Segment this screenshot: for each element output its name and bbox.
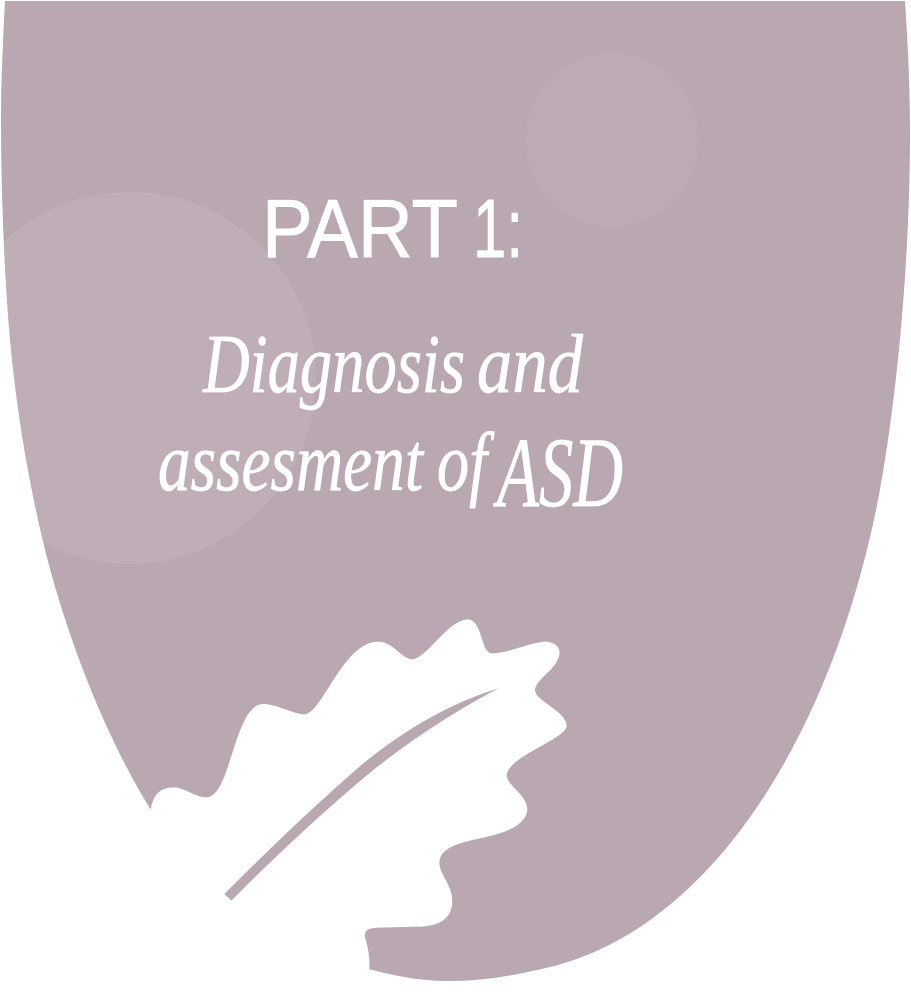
leaf vein (224, 688, 499, 901)
subtitle line 1: and (477, 318, 584, 411)
subtitle line 2: assesment (158, 416, 425, 509)
subtitle line 2: ASD (493, 417, 623, 528)
leaf silhouette (63, 619, 567, 1007)
subtitle line 1: Diagnosis (202, 318, 465, 411)
icon: white leaf (63, 619, 567, 1007)
decorative circle: small (525, 53, 699, 227)
decorative circle: large (4, 242, 44, 542)
subtitle line 2: of (437, 416, 495, 509)
subtitle line 2 (158, 416, 623, 528)
title: PART 1: 1: (473, 182, 523, 275)
title: PART 1: PART (262, 182, 458, 275)
